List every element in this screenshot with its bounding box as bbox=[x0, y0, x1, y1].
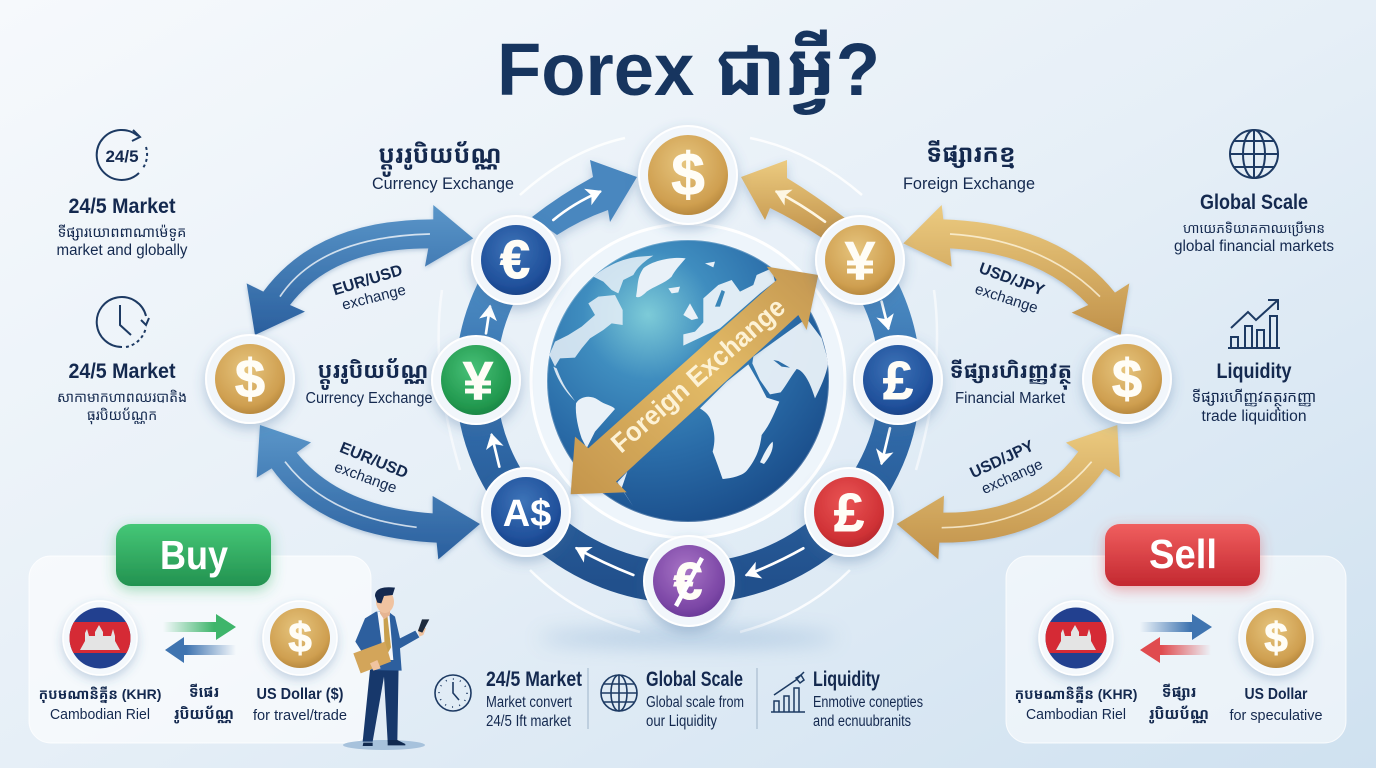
label: USD/JPY lower bbox=[967, 438, 1045, 498]
panel: Sell: កុបមណានិគ្នីន (KHR) bbox=[1015, 686, 1137, 703]
coin: left dollar: $ bbox=[235, 349, 265, 409]
coin: green yen bbox=[432, 336, 520, 424]
arrow: sell forward bbox=[1140, 614, 1212, 640]
ring direction arrows bbox=[486, 192, 890, 575]
arrow: buy back bbox=[165, 637, 236, 663]
arrow: upper left two-way bbox=[247, 205, 473, 335]
heading: Financial Market: Financial Market bbox=[955, 390, 1066, 407]
panel: Buy: ទីផេរ bbox=[189, 682, 219, 701]
left feature: 24/5 Market clock bbox=[57, 297, 187, 424]
left feature: 24/5 Market clock: សាកាមាកហាពឈរបាតិង bbox=[57, 389, 187, 405]
icon: Cambodian flag bbox=[1039, 601, 1113, 675]
bottom strip: 24/5 Market: 24/5 Ift market bbox=[486, 713, 572, 730]
arrow: sell back bbox=[1140, 637, 1211, 663]
coin: blue pound bbox=[854, 336, 942, 424]
icon: globe bbox=[1230, 130, 1278, 178]
panel: Sell: for speculative bbox=[1230, 707, 1322, 724]
icon: growth chart bbox=[771, 672, 805, 712]
label: USD/JPY upper: exchange bbox=[973, 281, 1040, 317]
circular currency ring bbox=[476, 260, 900, 583]
right feature: Liquidity: Liquidity bbox=[1216, 360, 1292, 383]
panel: Buy: កុបមណានិគ្នីន (KHR) bbox=[39, 686, 161, 703]
label: USD/JPY upper: USD/JPY bbox=[976, 260, 1047, 300]
label: EUR/USD upper: EUR/USD bbox=[331, 262, 405, 299]
label: USD/JPY upper bbox=[973, 260, 1047, 317]
bottom strip: 24/5 Market: 24/5 Market bbox=[486, 667, 582, 691]
icon: Cambodian flag bbox=[63, 601, 137, 675]
panel: Buy: for travel/trade bbox=[253, 707, 347, 724]
icon: clock bbox=[435, 675, 471, 711]
arrow: lower left two-way bbox=[257, 425, 480, 559]
coin: right dollar: $ bbox=[1112, 349, 1142, 409]
panel: Sell bbox=[1006, 524, 1346, 743]
label: EUR/USD upper: exchange bbox=[340, 282, 408, 314]
coin: euro bbox=[472, 216, 560, 304]
central arrow label: Foreign Exchange bbox=[605, 292, 791, 459]
coin: purple cedi: € bbox=[674, 553, 702, 611]
bottom strip: 24/5 Market: Market convert bbox=[486, 694, 573, 711]
panel: Sell: រូបិយប័ណ្ណ bbox=[1149, 704, 1209, 724]
coin: red pound bbox=[805, 468, 893, 556]
arrow: lower right two-way bbox=[897, 425, 1120, 559]
label: USD/JPY lower: USD/JPY bbox=[967, 438, 1037, 482]
heading: Currency Exchange top bbox=[372, 141, 514, 193]
heading: Foreign Exchange top bbox=[903, 141, 1035, 193]
panel: Sell: ទីផ្សារ bbox=[1162, 682, 1196, 701]
heading: Currency Exchange middle: Currency Exchange bbox=[306, 390, 432, 407]
arrow: euro to top dollar bbox=[532, 160, 637, 235]
button: Sell: Sell bbox=[1149, 531, 1217, 577]
coin: top dollar bbox=[639, 126, 737, 224]
button: Buy: Buy bbox=[160, 532, 228, 578]
bottom strip: Liquidity: Liquidity bbox=[813, 667, 880, 691]
icon: dollar coin bbox=[263, 601, 337, 675]
central arrow: Foreign Exchange bbox=[571, 267, 818, 494]
decorative arcs bbox=[439, 138, 937, 632]
heading: Currency Exchange middle: ប្តូររូបិយប័ណ្ណ bbox=[318, 358, 428, 391]
button: Sell bbox=[1105, 524, 1260, 586]
heading: Currency Exchange top: ប្តូររូបិយប័ណ្ណ bbox=[378, 141, 502, 176]
left feature: 24/5 Market: 24/5 Market bbox=[68, 195, 176, 218]
coin: gold yen bbox=[816, 216, 904, 304]
right feature: Liquidity bbox=[1192, 300, 1316, 425]
label: EUR/USD upper bbox=[331, 262, 408, 314]
globe with continents bbox=[531, 224, 845, 538]
label: USD/JPY lower: exchange bbox=[979, 456, 1045, 498]
panel: Buy: រូបិយប័ណ្ណ bbox=[174, 704, 234, 724]
heading: Foreign Exchange top: ទីផ្សារកខ្ម bbox=[926, 141, 1016, 169]
icon: 24/5 cycle: 24/5 bbox=[105, 147, 139, 166]
icon: dollar coin: $ bbox=[1264, 614, 1288, 661]
bottom strip: 24/5 Market bbox=[435, 667, 582, 730]
heading: Currency Exchange middle bbox=[306, 358, 432, 407]
bottom strip: Global Scale bbox=[601, 667, 744, 730]
icon: clock bbox=[97, 297, 149, 347]
coin: gold yen: ¥ bbox=[845, 231, 875, 291]
left feature: 24/5 Market: ទីផ្សារយោពពាណាម៉េទូគ bbox=[58, 223, 186, 241]
coin: red pound: £ bbox=[834, 483, 864, 543]
person with phone bbox=[343, 587, 429, 750]
coin: euro: € bbox=[500, 230, 530, 290]
icon: globe bbox=[601, 675, 637, 711]
arrow: buy forward bbox=[163, 614, 236, 640]
coin: left dollar bbox=[206, 335, 294, 423]
button: Buy bbox=[116, 524, 271, 586]
left feature: 24/5 Market clock: ធុរបិយប័ណ្ណក bbox=[87, 407, 157, 424]
left feature: 24/5 Market: market and globally bbox=[56, 242, 188, 259]
bottom strip: Liquidity: Enmotive conepties bbox=[813, 694, 923, 711]
panel: Sell: US Dollar bbox=[1244, 686, 1308, 703]
coin: right dollar bbox=[1083, 335, 1171, 423]
right feature: Global Scale: Global Scale bbox=[1200, 191, 1308, 214]
left feature: 24/5 Market bbox=[56, 130, 188, 259]
coin: blue pound: £ bbox=[883, 351, 913, 411]
coin: top dollar: $ bbox=[671, 141, 705, 208]
coin: australian dollar bbox=[482, 468, 570, 556]
label: EUR/USD lower: EUR/USD bbox=[337, 439, 410, 482]
coin: australian dollar: A$ bbox=[503, 493, 551, 535]
right feature: Liquidity: ទីផ្សារហើញ្ញវតត្ថុរកញ្ញា bbox=[1192, 387, 1316, 411]
bottom strip: Global Scale: Global Scale bbox=[646, 667, 743, 691]
icon: growth chart bbox=[1228, 300, 1280, 348]
coin: green yen: ¥ bbox=[463, 351, 493, 411]
label: EUR/USD lower bbox=[332, 439, 410, 497]
bottom strip: Liquidity bbox=[771, 667, 923, 730]
heading: Currency Exchange top: Currency Exchange bbox=[372, 175, 514, 193]
panel: Buy bbox=[29, 524, 371, 743]
right feature: Liquidity: trade liquidition bbox=[1202, 408, 1306, 425]
arrow: upper right two-way bbox=[903, 205, 1129, 335]
panel: Sell: Cambodian Riel bbox=[1026, 706, 1126, 723]
icon: dollar coin: $ bbox=[288, 614, 312, 661]
right feature: Global Scale bbox=[1174, 130, 1334, 255]
coin: purple cedi bbox=[644, 536, 734, 626]
right feature: Global Scale: global financial markets bbox=[1174, 238, 1334, 255]
panel: Buy: Cambodian Riel bbox=[50, 706, 150, 723]
heading: Financial Market: ទីផ្សារហិរញ្ញវត្ថុ bbox=[950, 359, 1072, 390]
label: EUR/USD lower: exchange bbox=[332, 459, 399, 497]
left feature: 24/5 Market clock: 24/5 Market bbox=[68, 360, 176, 383]
panel: Buy: US Dollar ($) bbox=[256, 686, 344, 703]
title: Forex ជាអ្វី? bbox=[497, 28, 880, 116]
bottom strip: Global Scale: our Liquidity bbox=[646, 713, 717, 730]
bottom strip: Global Scale: Global scale from bbox=[646, 694, 744, 711]
heading: Financial Market bbox=[950, 359, 1072, 407]
bottom strip: Liquidity: and ecnuubranits bbox=[813, 713, 911, 730]
right feature: Global Scale: ហាយេភទិយាគកាឈប្រើមាន bbox=[1183, 220, 1325, 237]
icon: dollar coin bbox=[1239, 601, 1313, 675]
heading: Foreign Exchange top: Foreign Exchange bbox=[903, 175, 1035, 193]
globe base shadow bbox=[538, 630, 838, 646]
arrow: yen to top dollar bbox=[741, 160, 845, 238]
